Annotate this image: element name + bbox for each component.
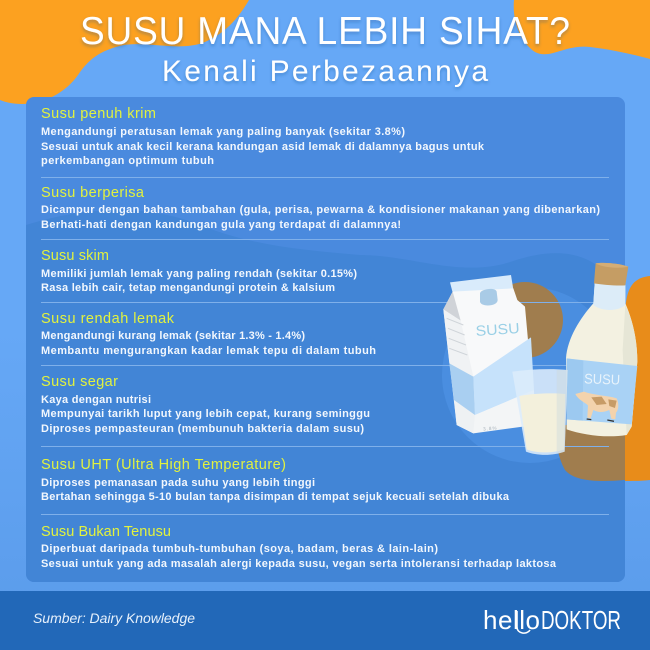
section: susu UHT: Diproses pemanasan pada suhu yang lebih tinggi	[41, 477, 315, 489]
logo: helloDOKTOR	[483, 605, 621, 635]
section: susu UHT: Susu UHT (Ultra High Temperature)	[41, 457, 286, 473]
icon: milk bottle	[566, 263, 637, 436]
logo: helloDOKTOR: hello	[483, 605, 540, 635]
orange blob: right side	[625, 276, 650, 481]
panel: milk types	[26, 97, 625, 582]
orange blob: top right	[514, 0, 650, 59]
orange blob: top left	[0, 0, 249, 104]
section: susu skim: Susu skim	[41, 248, 109, 264]
section: susu penuh krim: Susu penuh krim	[41, 106, 156, 122]
section: susu penuh krim	[41, 106, 485, 167]
brown circle behind carton	[512, 282, 563, 358]
section: susu skim	[41, 248, 357, 294]
section: susu penuh krim: perkembangan optimum tubuh	[41, 155, 214, 167]
section: susu segar: Kaya dengan nutrisi	[41, 394, 151, 406]
section: susu berperisa: Susu berperisa	[41, 185, 145, 201]
section: susu skim: Rasa lebih cair, tetap mengandungi protein & kalsium	[41, 282, 335, 294]
icon: cow	[575, 392, 618, 421]
section: susu bukan tenusu: Sesuai untuk yang ada masalah alergi kepada susu, vegan serta intoleransi terhadap laktosa	[41, 558, 557, 570]
section: susu UHT: Bertahan sehingga 5-10 bulan tanpa disimpan di tempat sejuk kecuali setelah dibuka	[41, 491, 510, 503]
section: susu skim: Memiliki jumlah lemak yang paling rendah (sekitar 0.15%)	[41, 268, 357, 280]
section: susu rendah lemak: Susu rendah lemak	[41, 311, 175, 327]
icon: milk bottle: SUSU	[584, 370, 620, 388]
illustration: milk carton, glass and bottle	[443, 263, 637, 455]
section: susu penuh krim: Mengandungi peratusan lemak yang paling banyak (sekitar 3.8%)	[41, 126, 405, 138]
icon: milk carton: 3.8%	[483, 426, 497, 432]
section: susu rendah lemak	[41, 311, 376, 357]
subtitle: Kenali Perbezaannya	[162, 55, 488, 88]
section: susu bukan tenusu: Diperbuat daripada tumbuh-tumbuhan (soya, badam, beras & lain-lain)	[41, 543, 438, 555]
logo: helloDOKTOR: DOKTOR	[541, 605, 621, 635]
icon: glass of milk	[512, 369, 568, 455]
source note: Sumber: Dairy Knowledge	[33, 610, 195, 626]
section: susu penuh krim: Sesuai untuk anak kecil kerana kandungan asid lemak di dalamnya bagus untuk	[41, 141, 485, 153]
brown shape behind bottle	[556, 425, 625, 481]
section: susu segar: Diproses pempasteuran (membunuh bakteria dalam susu)	[41, 423, 364, 435]
section: susu berperisa	[41, 185, 600, 231]
icon: milk carton: SUSU	[475, 321, 520, 340]
section: susu berperisa: Dicampur dengan bahan tambahan (gula, perisa, pewarna & kondisioner makanan yang dibenarkan)	[41, 204, 600, 216]
title: SUSU MANA LEBIH SIHAT?	[80, 9, 570, 53]
section: susu segar	[41, 374, 370, 435]
section: susu berperisa: Berhati-hati dengan kandungan gula yang terdapat di dalamnya!	[41, 219, 401, 231]
section: susu segar: Mempunyai tarikh luput yang lebih cepat, kurang seminggu	[41, 408, 370, 420]
section: susu bukan tenusu	[41, 524, 557, 570]
section: susu UHT	[41, 457, 510, 503]
section: susu bukan tenusu: Susu Bukan Tenusu	[41, 524, 171, 540]
footer bar	[0, 591, 650, 650]
section: susu rendah lemak: Membantu mengurangkan kadar lemak tepu di dalam tubuh	[41, 345, 376, 357]
section: susu rendah lemak: Mengandungi kurang lemak (sekitar 1.3% - 1.4%)	[41, 330, 305, 342]
section: susu segar: Susu segar	[41, 374, 118, 390]
icon: milk carton	[443, 275, 535, 433]
